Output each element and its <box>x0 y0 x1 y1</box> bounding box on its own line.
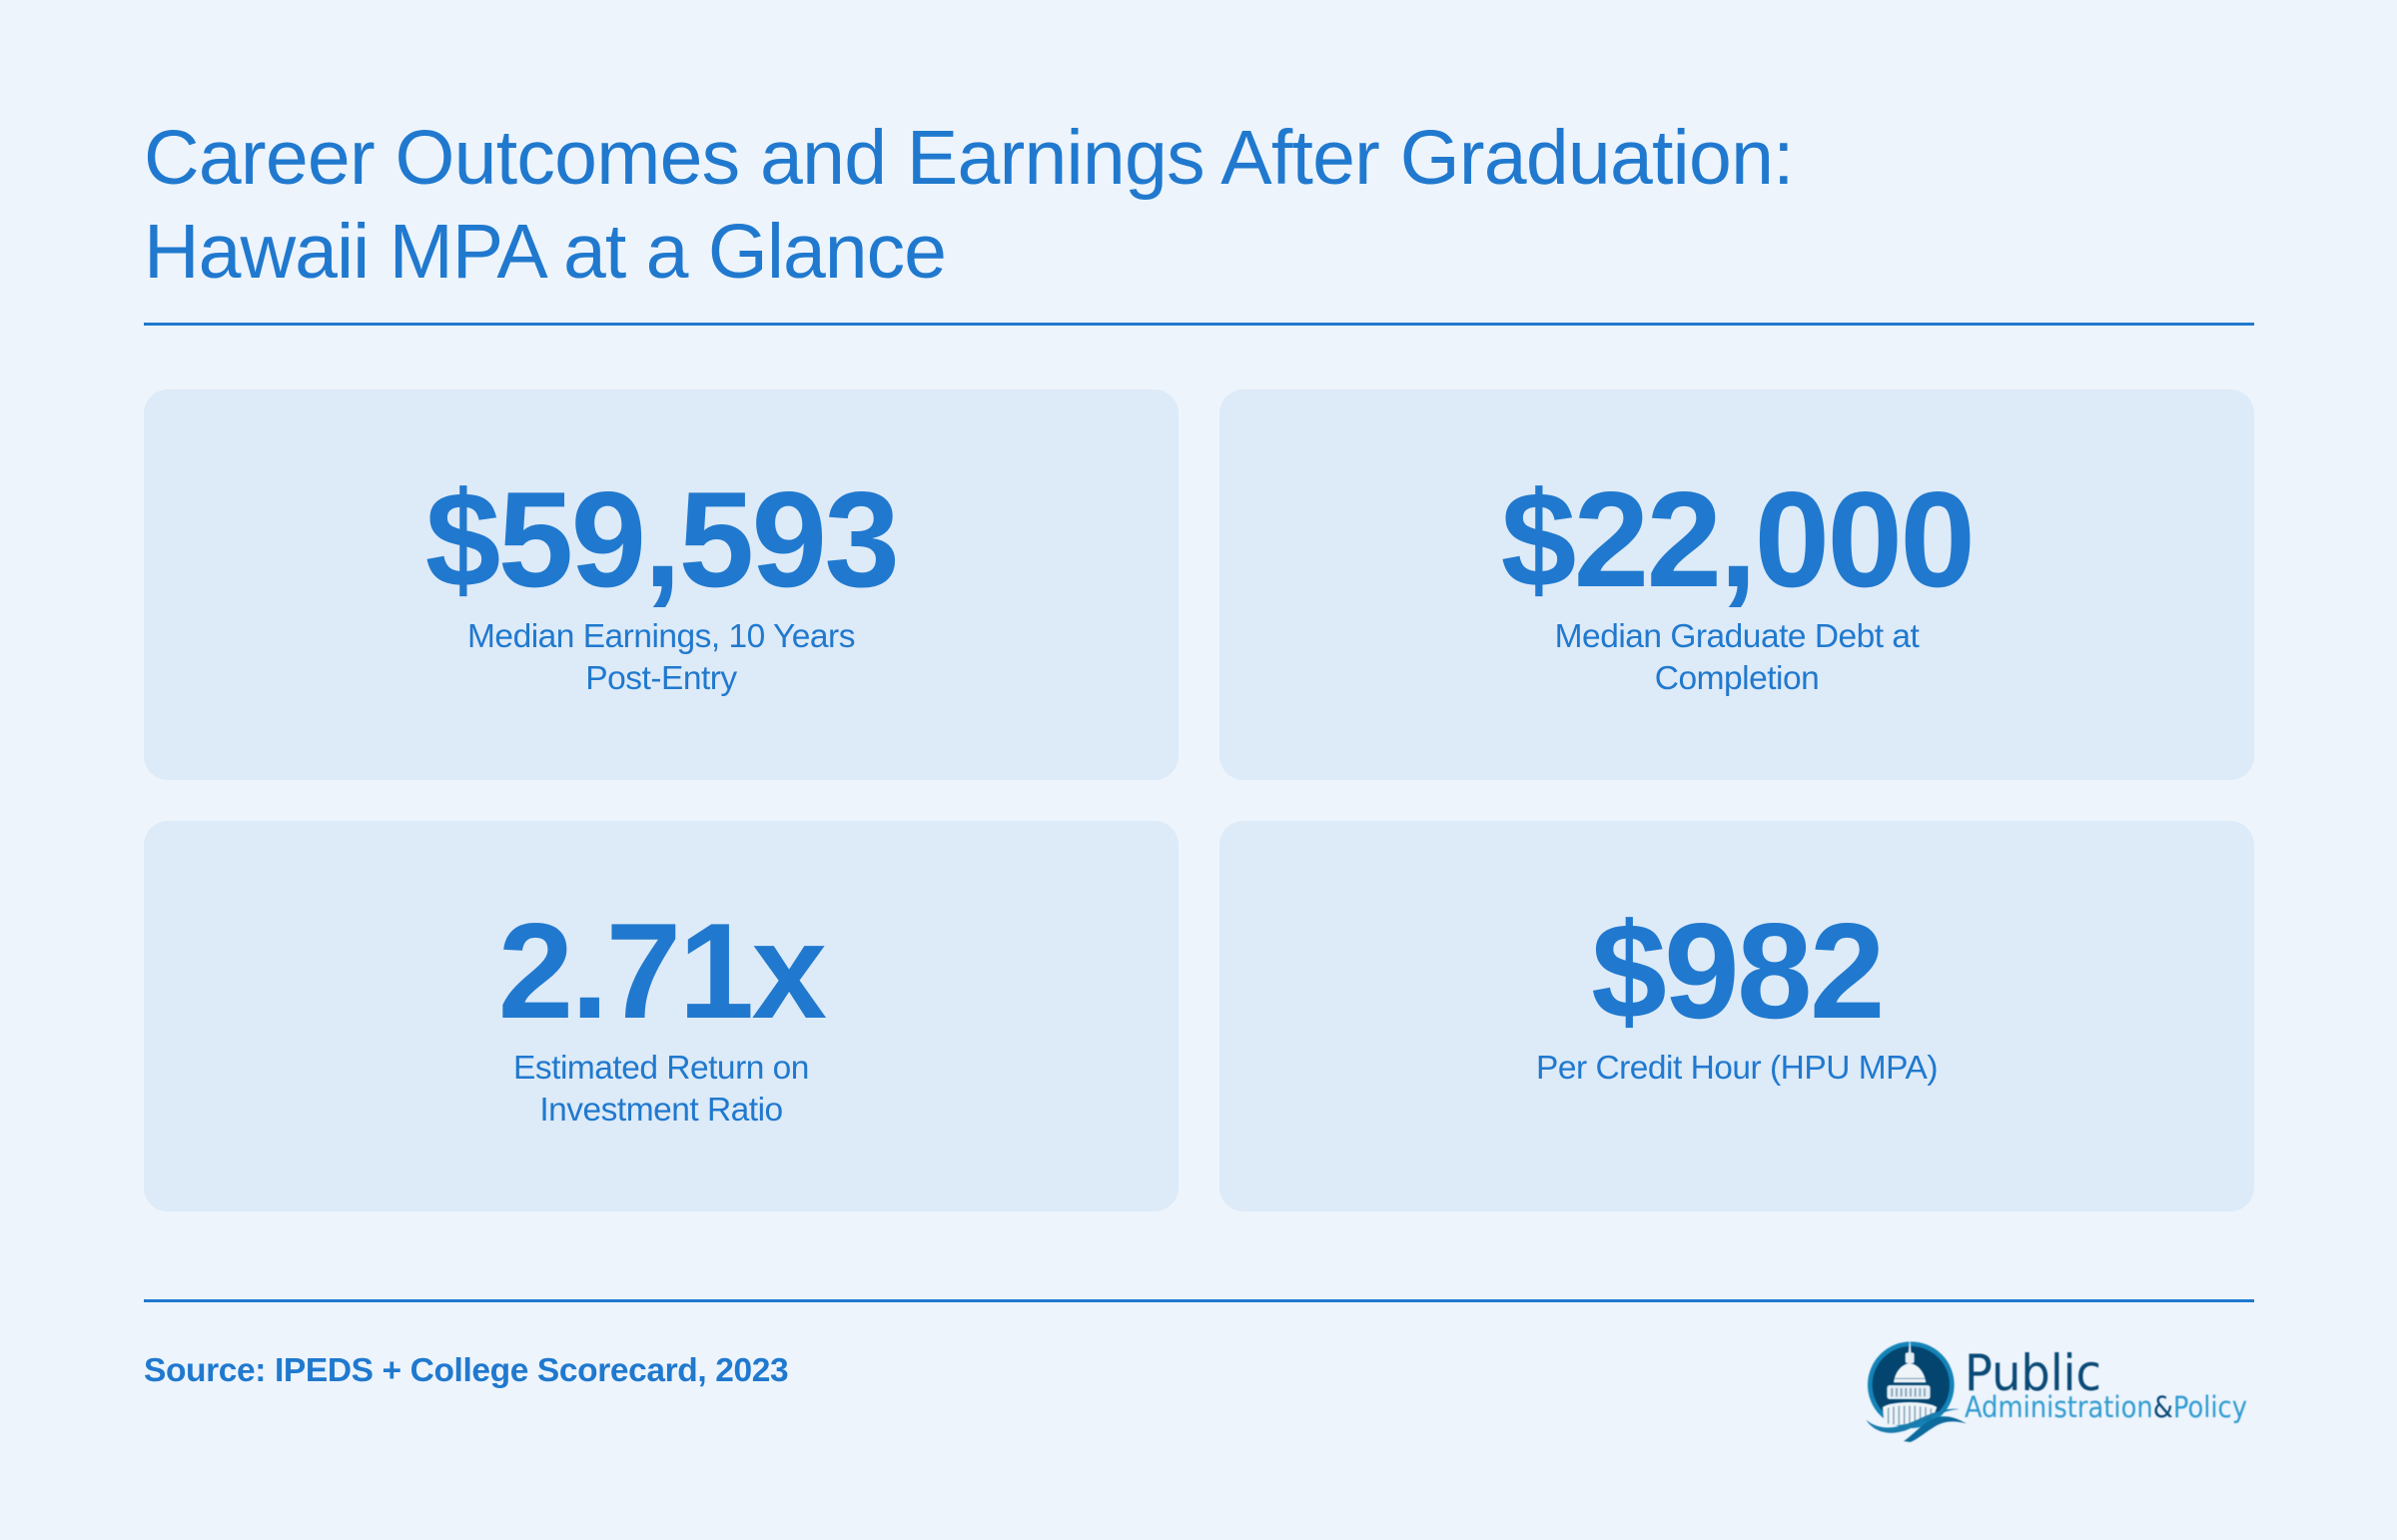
logo text: Public: Public <box>1965 1344 2101 1402</box>
panel: return on investment <box>144 821 1179 1211</box>
stat: cost label: Per Credit Hour (HPU MPA) <box>1536 1050 1938 1087</box>
stat: debt label: Median Graduate Debt at <box>1555 618 1919 655</box>
stat: ROI label: Estimated Return on <box>513 1050 809 1087</box>
logo <box>1866 1340 2247 1443</box>
stat: cost value: $982 <box>1591 895 1883 1047</box>
stat: ROI label <box>513 1050 809 1129</box>
stat: debt value: $22,000 <box>1501 463 1973 615</box>
stat: earnings label <box>467 618 855 697</box>
icon: capitol dome <box>1866 1341 1967 1442</box>
stat: earnings label: Post-Entry <box>585 660 737 697</box>
panel: median debt <box>1219 389 2254 780</box>
stat: debt label <box>1555 618 1920 697</box>
title: Career Outcomes and Earnings After Graduation: <box>144 115 1794 201</box>
logo text: Administration & Policy: Administration&Policy <box>1965 1390 2247 1424</box>
panel: median earnings <box>144 389 1179 780</box>
title: Hawaii MPA at a Glance <box>144 209 946 295</box>
source note: Source: IPEDS + College Scorecard, 2023 <box>144 1352 788 1389</box>
title <box>144 115 1794 295</box>
stat: debt label: Completion <box>1655 660 1819 697</box>
stat: earnings label: Median Earnings, 10 Years <box>467 618 855 655</box>
panel: credit hour cost <box>1219 821 2254 1211</box>
stat: earnings value: $59,593 <box>425 463 897 615</box>
stat: ROI value: 2.71x <box>498 895 824 1047</box>
stat: ROI label: Investment Ratio <box>539 1092 783 1129</box>
